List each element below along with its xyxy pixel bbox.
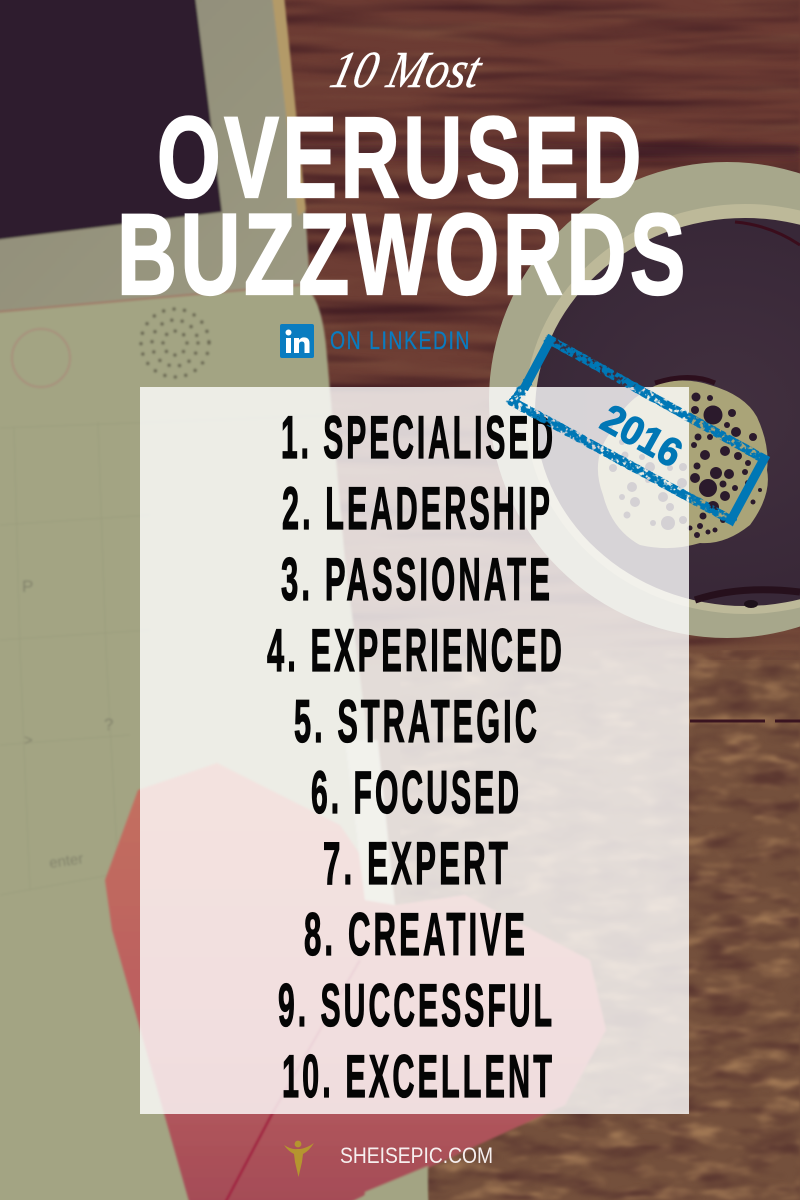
website credit: SHEISEPIC.COM: [340, 1143, 493, 1168]
background photo: white tablet with keyboard: [0, 0, 428, 1200]
tablet home button: [12, 329, 70, 387]
icon: gold figure logo: [284, 1141, 314, 1177]
keyboard key outlines: [0, 415, 340, 895]
buzzword list: 8. CREATIVE: [304, 901, 528, 968]
buzzword list: 7. EXPERT: [323, 830, 511, 897]
icon: LinkedIn logo: [280, 324, 314, 358]
keyboard key labels: [22, 577, 113, 872]
buzzword list: 3. PASSIONATE: [281, 546, 553, 613]
stamp: 2016: 2016: [594, 396, 689, 476]
keyboard key labels: enter: [48, 850, 84, 872]
coffee foam and bubbles: [598, 378, 768, 548]
subheading: on LinkedIn: ON LINKEDIN: [330, 327, 471, 355]
white translucent list panel: [140, 387, 689, 1114]
keyboard key labels: P: [22, 577, 33, 596]
stamp: 2016: [513, 340, 764, 520]
keyboard key labels: ?: [104, 715, 113, 734]
buzzword list: 2. LEADERSHIP: [282, 475, 553, 542]
buzzword list: [267, 404, 565, 1110]
small script heading: 10 Most: 10 Most: [325, 42, 488, 99]
buzzword list: 6. FOCUSED: [311, 759, 522, 826]
background photo: coffee cup: [489, 162, 800, 638]
main title: [117, 94, 689, 319]
buzzword list: 5. STRATEGIC: [294, 688, 540, 755]
tablet speaker grille: [141, 309, 209, 377]
background photo: pink paper heart: [105, 740, 606, 1200]
keyboard key labels: >: [24, 732, 33, 749]
